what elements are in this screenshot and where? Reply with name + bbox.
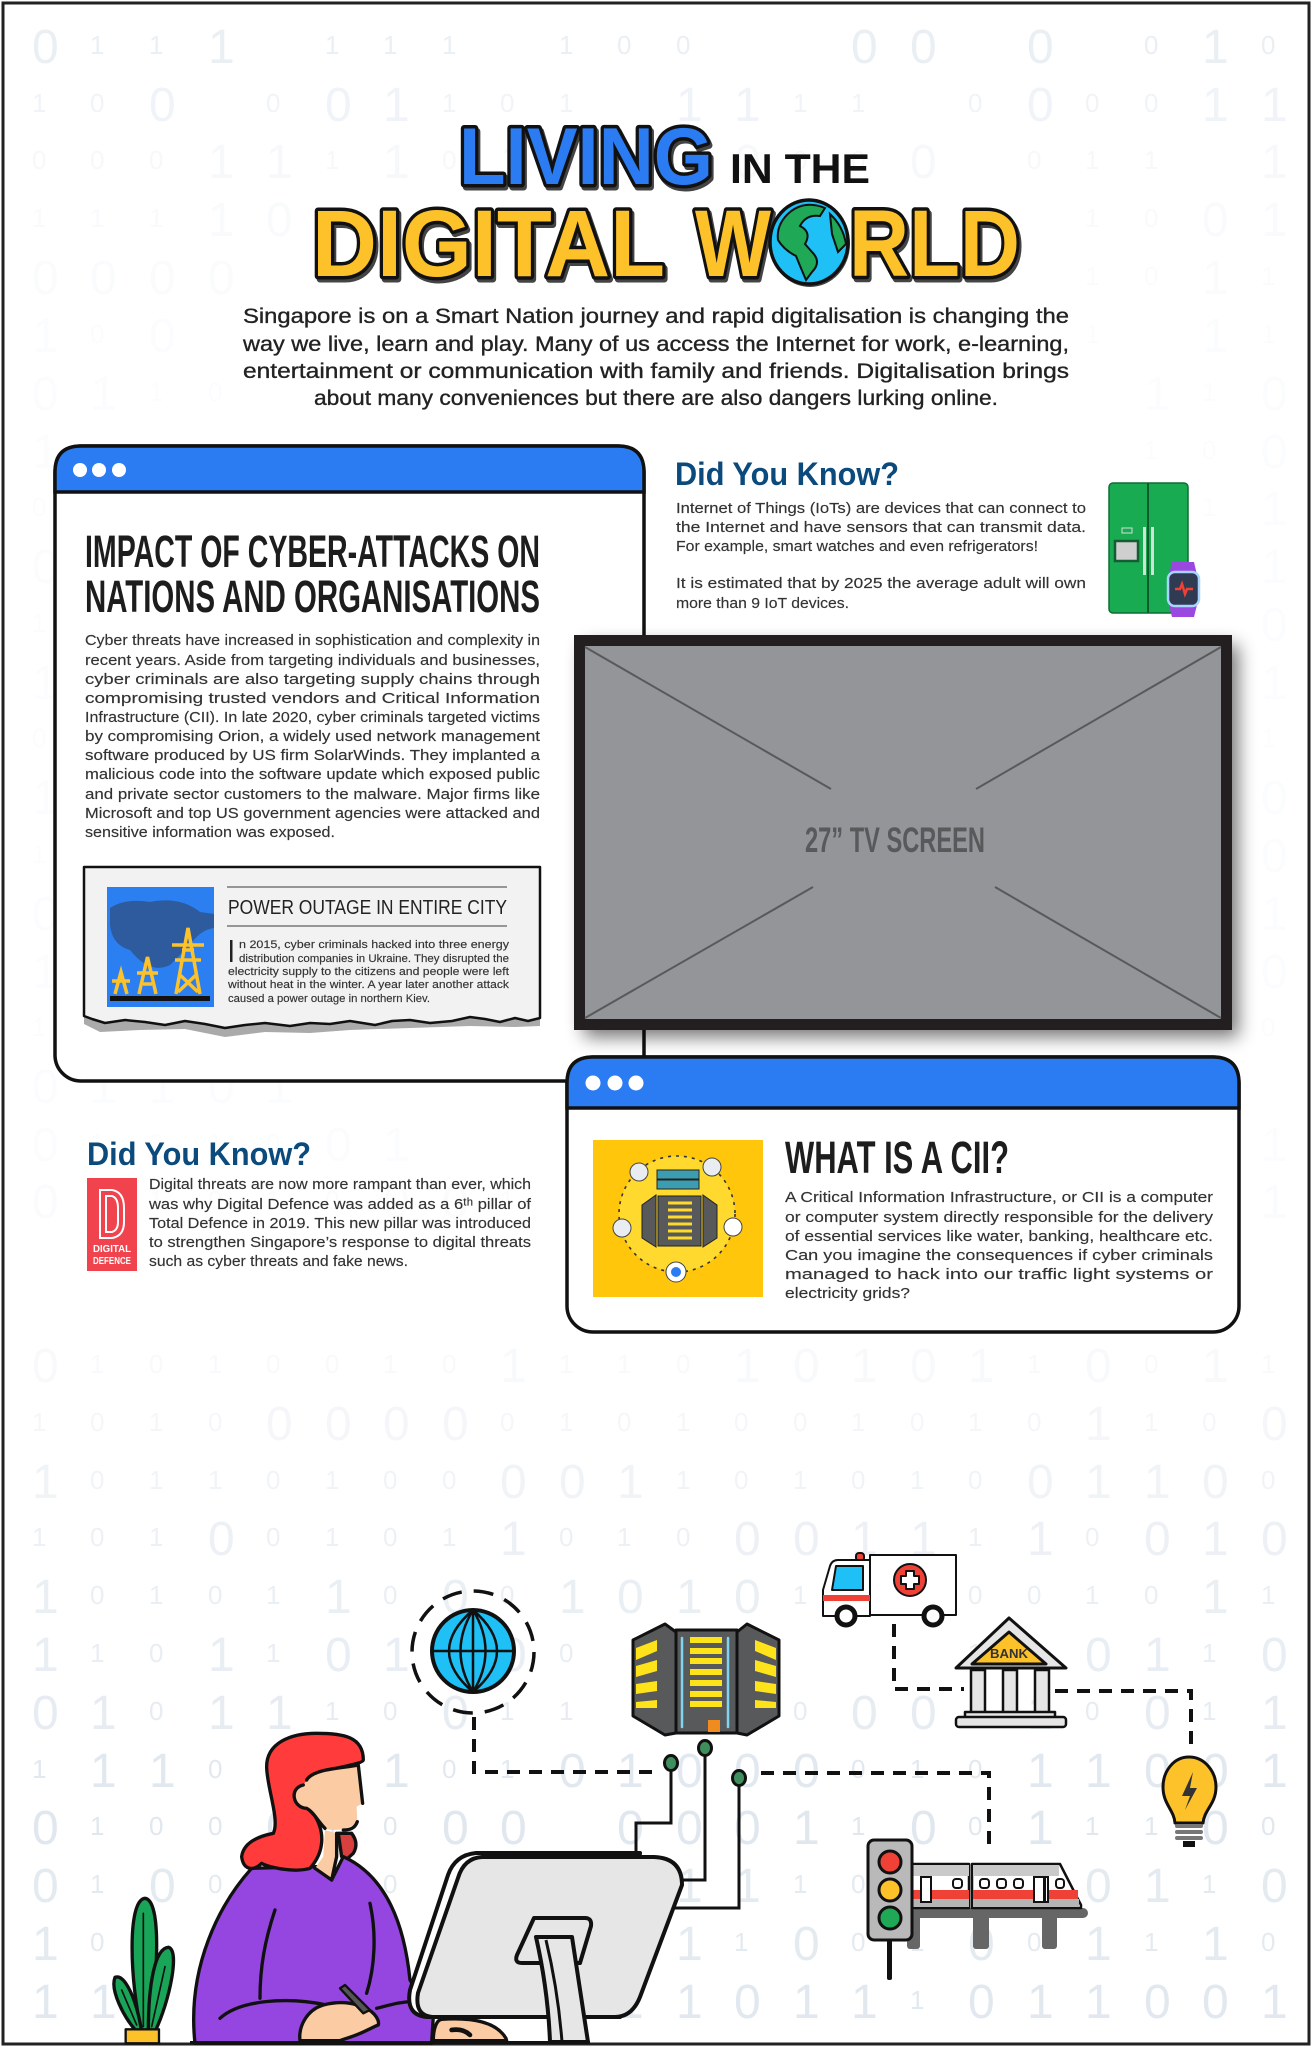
background: binary digits pattern: 01 [32,492,1216,522]
background: binary digits pattern: 00001 [32,252,1229,305]
icon: light bulb [1163,1757,1216,1847]
title: Living in the Digital World: W [697,194,773,300]
did you know: digital defence: such as cyber threats and fake news. [149,1253,408,1270]
background: binary digits pattern: 10 [32,772,1288,825]
title: Living in the Digital World: DIGITAL [312,191,665,297]
body text: CII: managed to hack into our traffic light systems or [785,1266,1213,1283]
desk line [190,2041,590,2044]
background: binary digits pattern: 10100101 [90,1638,1216,1668]
background: binary digits pattern: 10101 [149,1185,514,1215]
background: binary digits pattern: 10010111000 [32,88,1158,118]
TV screen placeholder: 27” TV SCREEN [805,821,985,860]
body text: CII: of essential services like water, banking, healthcare etc. [785,1228,1213,1245]
background: binary digits pattern: 0100111010 [208,1513,1288,1566]
body text: CII: electricity grids? [785,1285,910,1302]
title: Living in the Digital World: RLD [849,191,1020,297]
did you know: digital defence: Total Defence in 2019. This new pillar was introduced [149,1215,531,1232]
background: binary digits pattern: 11 [32,657,1288,710]
background: binary digits pattern: 1010 [90,1128,280,1158]
intro paragraph: about many conveniences but there are also dangers lurking online. [314,387,998,410]
did you know: digital defence [87,1136,532,1271]
icon: globe with dashed ring [412,1591,534,1713]
icon: train on viaduct [907,1864,1088,1949]
TV screen placeholder [574,635,1238,1037]
background: binary digits pattern: 01101 [32,1061,293,1114]
body text: CII: A Critical Information Infrastructure, or CII is a computer [785,1189,1213,1206]
panel: impact of cyber-attacks [55,446,644,1081]
background: binary digits pattern: 1010011 [32,1918,1229,1971]
background: binary digits pattern: 11010100011001 [90,1745,1288,1798]
background: binary digits pattern: 011 [90,319,1275,349]
background: binary digits pattern: 001111010 [32,1860,1288,1913]
intro paragraph [242,305,1069,410]
heading: what is a CII: WHAT IS A CII? [785,1132,1009,1183]
icon: server [633,1624,779,1735]
news clipping: power outage: distribution companies in Ukraine. They disrupted the [239,953,509,965]
background: binary digits pattern: 101 [32,310,1229,363]
background: binary digits pattern: 1111110000 [90,30,1275,60]
background: binary digits pattern: 101 [149,377,1216,407]
background: binary digits pattern: 01010101 [149,1985,924,2015]
title: Living in the Digital World: LIVING [461,115,715,205]
did you know: IoT: the Internet and have sensors that can transmit data. [676,519,1086,536]
title: Living in the Digital World: LIVING [459,112,713,202]
background: binary digits pattern: 0101001100101 [90,1580,1275,1610]
clipping image: pylons over Ukraine [107,887,214,1007]
background: binary digits pattern: 1 [1261,483,1288,536]
news clipping: power outage: without heat in the winter. A year later another attack [227,979,510,991]
background: binary digits pattern: 01 [1144,435,1216,465]
background: binary digits pattern: 11111011011001 [32,1976,1288,2029]
body text: impact: cyber criminals are also targeting supply chains through [85,672,540,688]
background: binary digits pattern: 00111011 [149,79,1288,132]
background: binary digits pattern: 110101011 [32,1571,1229,1624]
background: binary digits pattern: 10 [32,426,1288,479]
background: binary digits pattern: 1010010100101010 [32,1407,1216,1437]
plant [114,1898,173,2043]
did you know: digital defence: to strengthen Singapore’s response to digital threats [149,1234,531,1251]
intro paragraph: way we live, learn and play. Many of us access the Internet for work, e-learning, [242,333,1069,356]
background: binary digits pattern: 1001 [208,194,1288,247]
background: binary digits pattern: 010101010101010 [90,1927,1275,1957]
body text: impact: Cyber threats have increased in sophistication and complexity in [85,633,540,649]
background: binary digits pattern: 000010 [266,1398,1288,1451]
background: binary digits pattern: 1001010110 [90,1811,1275,1841]
body text: CII [785,1189,1214,1302]
icon: digital defence logo [87,1178,137,1271]
panel: what is a CII [567,1057,1239,1332]
background: binary digits pattern: 10 [32,946,1288,999]
background: binary digits pattern: 101 [1085,261,1275,291]
body text: impact: and private sector customers to the malware. Major firms like [85,787,540,803]
background: binary digits pattern: 10010110 [32,1456,1229,1509]
title: Living in the Digital World: DIGITAL [314,194,667,300]
background: binary digits pattern: 01 [32,723,1275,753]
background: binary digits pattern: 01 [32,888,1288,941]
background: binary digits pattern: 11101 [32,203,1158,233]
background: binary digits pattern: 01110100101 [32,1687,1288,1740]
title: Living in the Digital World: IN THE [730,145,870,192]
icon: ambulance [823,1553,956,1625]
image: critical infrastructure network [593,1140,763,1297]
body text: impact [85,633,541,841]
background: binary digits pattern: 101101010101 [90,1869,1216,1899]
did you know: digital defence: was why Digital Defence was added as a 6ᵗʰ pillar of [148,1196,532,1213]
background: binary digits pattern: 01 [32,541,1288,594]
connectors: dashed and solid network lines [474,1624,1191,1908]
news clipping: power outage: POWER OUTAGE IN ENTIRE CITY [228,896,507,919]
background: binary digits pattern: 0 [1261,599,1288,652]
intro paragraph: entertainment or communication with family and friends. Digitalisation brings [243,360,1069,383]
icon: traffic light [868,1840,912,1980]
background: binary digits pattern: 010110101 [149,1696,1216,1726]
background: binary digits pattern: 101010101010 [32,1522,1099,1552]
heading: impact [85,526,540,622]
icon: digital defence logo: DEFENCE [93,1256,131,1267]
title: Living in the Digital World: RLD [851,194,1022,300]
heading: impact: NATIONS AND ORGANISATIONS [85,571,540,622]
body text: impact: malicious code into the software update which exposed public [85,767,540,783]
did you know: IoT: For example, smart watches and even refrigerators! [676,538,1038,555]
body text: CII: or computer system directly responsible for the delivery [785,1209,1214,1226]
body text: CII: Can you imagine the consequences if cyber criminals [785,1247,1213,1264]
did you know: digital defence: Did You Know? [87,1136,311,1172]
did you know: IoT: It is estimated that by 2025 the average adult will own [676,575,1086,592]
body text: impact: software produced by US firm SolarWinds. They implanted a [85,748,541,764]
heading: impact: IMPACT OF CYBER-ATTACKS ON [85,526,540,577]
background: binary digits pattern: 000101100011 [32,145,1158,175]
body text: impact: sensitive information was exposed. [85,825,335,841]
icon: digital defence logo: DIGITAL [93,1244,131,1255]
background: binary digits pattern: 01101001010100 [90,1465,1275,1495]
background: binary digits pattern: 1010010110101 [90,1349,1275,1379]
news clipping: power outage: caused a power outage in northern Kiev. [228,993,430,1005]
background: binary digits pattern: 10 [32,1012,1275,1042]
background: binary digits pattern: 01001 [32,1176,1288,1229]
news clipping: power outage: electricity supply to the citizens and people were left [228,966,509,978]
woman [194,1733,507,2043]
background: binary digits pattern: 010001 [32,21,1229,74]
background: binary digits pattern: 11010010 [32,1629,1288,1682]
icon: bank [956,1618,1066,1727]
body text: impact: compromising trusted vendors and Critical Information [85,691,540,707]
body text: impact: Infrastructure (CII). In late 2020, cyber criminals targeted victims [85,710,540,726]
background: binary digits pattern: 0011 [32,1119,1288,1172]
background: binary digits pattern: 011010101 [32,1340,1229,1393]
icon: smart watch [1168,562,1199,617]
did you know: IoT: more than 9 IoT devices. [676,595,849,612]
background: binary digits pattern: 1 [32,839,46,869]
title: Living in the Digital World [312,112,1022,300]
background: binary digits pattern: 0 [1261,830,1288,883]
did you know: IoT: Internet of Things (IoTs) are devices that can connect to [676,500,1086,517]
title: Living in the Digital World: W [695,191,771,297]
illustration: woman at computer [114,1733,682,2044]
body text: impact: Microsoft and top US government agencies were attacked and [85,806,540,822]
did you know: IoT: Did You Know? [675,456,899,492]
icon: bank: BANK [990,1646,1029,1661]
body text: impact: by compromising Orion, a widely used network management [85,729,540,745]
background: binary digits pattern: 0110 [32,368,1288,421]
background: binary digits pattern: 1111001 [208,136,1288,189]
background: binary digits pattern: 00000001010 [32,1802,1229,1855]
intro paragraph: Singapore is on a Smart Nation journey and rapid digitalisation is changing the [243,305,1069,328]
did you know: digital defence: Digital threats are now more rampant than ever, which [149,1176,531,1193]
background: binary digits pattern: 1 [32,608,46,638]
body text: impact: recent years. Aside from targeting individuals and businesses, [85,653,540,669]
news clipping: power outage: n 2015, cyber criminals hacked into three energy [239,939,510,951]
news clipping: power outage [84,867,540,1037]
background: binary digits pattern: 10101010 [32,1754,982,1784]
icon: refrigerator [1109,483,1188,613]
monitor [409,1853,682,2042]
did you know: IoT [675,456,1199,617]
